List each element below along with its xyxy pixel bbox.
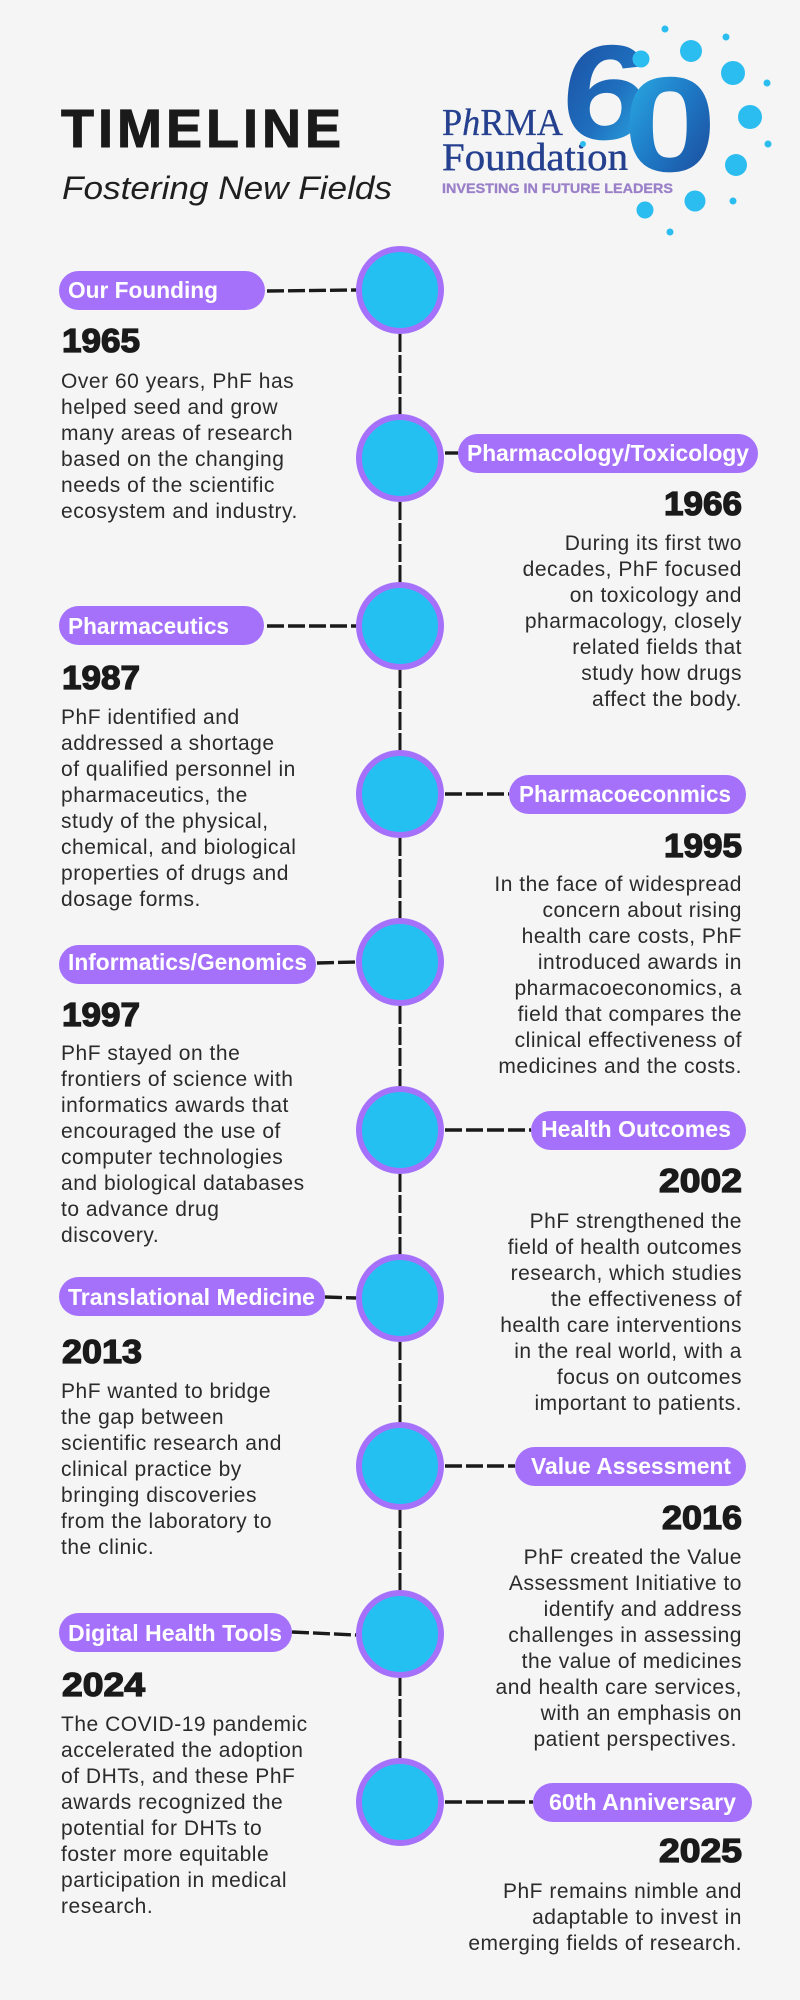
milestone: 60th Anniversary 2025: PhF remains nimble and: [503, 1880, 742, 1903]
milestone: Digital Health Tools 2024: research.: [61, 1895, 153, 1918]
milestone: Pharmacoeconmics 1995: concern about rising: [542, 899, 742, 922]
milestone: Digital Health Tools 2024: potential for DHTs to: [61, 1817, 262, 1840]
milestone: Value Assessment 2016: challenges in assessing: [508, 1624, 742, 1647]
milestone: Value Assessment 2016: and health care services,: [496, 1676, 742, 1699]
milestone: Health Outcomes 2002: health care interventions: [500, 1314, 742, 1337]
milestone: Value Assessment 2016: Value Assessment: [531, 1453, 731, 1479]
milestone: Pharmacology/Toxicology 1966: related fields that: [572, 636, 742, 659]
milestone: Health Outcomes 2002: in the real world, with a: [514, 1340, 742, 1363]
milestone: Translational Medicine 2013: bringing discoveries: [61, 1484, 257, 1507]
milestone: Pharmacoeconmics 1995: clinical effectiveness of: [515, 1029, 742, 1052]
logo: PhRMA Foundation 60: [442, 18, 772, 236]
milestone: 60th Anniversary 2025: 60th Anniversary: [549, 1789, 736, 1815]
milestone: Pharmacology/Toxicology 1966: study how drugs: [581, 662, 742, 685]
milestone: Pharmaceutics 1987: dosage forms.: [61, 888, 201, 911]
milestone: Pharmacoeconmics 1995: Pharmacoeconmics: [519, 781, 731, 807]
milestone: Translational Medicine 2013: Translational Medicine: [68, 1284, 315, 1310]
timeline nodes: [359, 249, 441, 1843]
milestone: 60th Anniversary 2025: [468, 1783, 752, 1955]
milestone: Health Outcomes 2002: Health Outcomes: [541, 1116, 731, 1142]
milestone: Translational Medicine 2013: the clinic.: [61, 1536, 154, 1559]
title: TIMELINE: [61, 99, 341, 159]
milestone: Pharmacoeconmics 1995: health care costs, PhF: [522, 925, 742, 948]
milestone: Informatics/Genomics 1997: [59, 945, 316, 1247]
milestone: Digital Health Tools 2024: participation in medical: [61, 1869, 287, 1892]
milestone: Translational Medicine 2013: [59, 1277, 325, 1559]
milestone: Pharmacoeconmics 1995: 1995: [664, 827, 742, 864]
milestone: Digital Health Tools 2024: [59, 1613, 308, 1918]
logo wordmark: PhRMA: [442, 102, 564, 144]
milestone: Pharmaceutics 1987: addressed a shortage: [61, 732, 275, 755]
milestone: Translational Medicine 2013: PhF wanted to bridge: [61, 1380, 271, 1403]
logo number 60: 0: [623, 50, 717, 200]
milestone: Pharmacology/Toxicology 1966: decades, PhF focused: [523, 558, 742, 581]
connectors: [267, 290, 533, 1802]
logo wordmark: [442, 102, 628, 179]
milestone: Health Outcomes 2002: [500, 1111, 746, 1415]
milestone: Translational Medicine 2013: clinical practice by: [61, 1458, 242, 1481]
milestone: Informatics/Genomics 1997: informatics awards that: [61, 1094, 289, 1117]
milestone: 60th Anniversary 2025: 2025: [659, 1832, 742, 1869]
milestone: Pharmacoeconmics 1995: In the face of widespread: [494, 873, 742, 896]
milestone: Pharmacoeconmics 1995: field that compares the: [518, 1003, 742, 1026]
milestone: Translational Medicine 2013: from the laboratory to: [61, 1510, 272, 1533]
milestone: Pharmaceutics 1987: 1987: [62, 659, 140, 696]
milestone: Health Outcomes 2002: research, which studies: [511, 1262, 742, 1285]
milestone: Health Outcomes 2002: the effectiveness of: [551, 1288, 742, 1311]
milestone: Pharmacology/Toxicology 1966: 1966: [664, 485, 742, 522]
milestone: Our Founding 1965: Over 60 years, PhF has: [61, 370, 294, 393]
milestone: Health Outcomes 2002: focus on outcomes: [557, 1366, 742, 1389]
logo number 60: [557, 18, 717, 200]
milestone: Value Assessment 2016: identify and address: [544, 1598, 742, 1621]
milestone: Pharmacology/Toxicology 1966: pharmacology, closely: [525, 610, 742, 633]
milestone: Pharmaceutics 1987: PhF identified and: [61, 706, 240, 729]
milestone: Digital Health Tools 2024: Digital Health Tools: [68, 1620, 282, 1646]
milestone: Informatics/Genomics 1997: discovery.: [61, 1224, 159, 1247]
milestone: Value Assessment 2016: patient perspectives.: [533, 1728, 737, 1751]
milestone: Health Outcomes 2002: PhF strengthened the: [530, 1210, 742, 1233]
milestone: 60th Anniversary 2025: emerging fields of research.: [468, 1932, 742, 1955]
milestone: Pharmacology/Toxicology 1966: During its first two: [565, 532, 742, 555]
milestone: Informatics/Genomics 1997: and biological databases: [61, 1172, 305, 1195]
milestone: Pharmaceutics 1987: properties of drugs and: [61, 862, 289, 885]
milestone: Pharmacoeconmics 1995: pharmacoeconomics, a: [514, 977, 742, 1000]
milestone: Our Founding 1965: Our Founding: [68, 277, 218, 303]
milestone: Health Outcomes 2002: 2002: [659, 1162, 742, 1199]
milestone: 60th Anniversary 2025: adaptable to invest in: [532, 1906, 742, 1929]
milestone: Pharmaceutics 1987: of qualified personnel in: [61, 758, 296, 781]
milestone: Translational Medicine 2013: 2013: [62, 1333, 142, 1370]
milestone: Pharmacoeconmics 1995: medicines and the costs.: [498, 1055, 742, 1078]
milestone: Digital Health Tools 2024: of DHTs, and these PhF: [61, 1765, 295, 1788]
milestone: Digital Health Tools 2024: The COVID-19 pandemic: [61, 1713, 308, 1736]
milestone: Value Assessment 2016: with an emphasis on: [540, 1702, 742, 1725]
logo wordmark: Foundation: [442, 136, 628, 179]
logo bubbles: [580, 26, 772, 236]
milestone: Pharmacology/Toxicology 1966: Pharmacology/Toxicology: [467, 440, 749, 466]
milestone: Pharmaceutics 1987: Pharmaceutics: [68, 613, 229, 639]
milestone: Pharmacoeconmics 1995: [494, 775, 746, 1078]
milestone: Pharmacology/Toxicology 1966: [458, 434, 758, 711]
milestone: Our Founding 1965: based on the changing: [61, 448, 284, 471]
milestone: Pharmacology/Toxicology 1966: on toxicology and: [570, 584, 742, 607]
milestone: Informatics/Genomics 1997: frontiers of science with: [61, 1068, 293, 1091]
milestone: Digital Health Tools 2024: awards recognized the: [61, 1791, 283, 1814]
milestone: Health Outcomes 2002: important to patients.: [534, 1392, 742, 1415]
milestone: Our Founding 1965: many areas of research: [61, 422, 293, 445]
milestone: Translational Medicine 2013: the gap between: [61, 1406, 224, 1429]
milestone: Our Founding 1965: helped seed and grow: [61, 396, 278, 419]
milestone: Our Founding 1965: 1965: [62, 322, 140, 359]
milestone: Informatics/Genomics 1997: computer technologies: [61, 1146, 283, 1169]
milestone: Informatics/Genomics 1997: encouraged the use of: [61, 1120, 281, 1143]
milestone: Our Founding 1965: [59, 271, 298, 523]
logo number 60: 6: [557, 18, 655, 168]
milestone: Pharmaceutics 1987: pharmaceutics, the: [61, 784, 248, 807]
milestone: Digital Health Tools 2024: foster more equitable: [61, 1843, 269, 1866]
milestone: Pharmacology/Toxicology 1966: affect the body.: [592, 688, 742, 711]
timeline spine: [398, 334, 402, 1758]
logo tagline: INVESTING IN FUTURE LEADERS: [442, 180, 673, 196]
milestone: Digital Health Tools 2024: accelerated the adoption: [61, 1739, 304, 1762]
milestone: Digital Health Tools 2024: 2024: [62, 1666, 146, 1703]
subtitle: Fostering New Fields: [62, 170, 392, 206]
milestone: Pharmacoeconmics 1995: introduced awards in: [538, 951, 742, 974]
milestone: Value Assessment 2016: the value of medicines: [522, 1650, 742, 1673]
milestone: Translational Medicine 2013: scientific research and: [61, 1432, 282, 1455]
milestone: Pharmaceutics 1987: study of the physical,: [61, 810, 269, 833]
milestone: Our Founding 1965: needs of the scientific: [61, 474, 275, 497]
milestone: Informatics/Genomics 1997: to advance drug: [61, 1198, 219, 1221]
milestone: Health Outcomes 2002: field of health outcomes: [508, 1236, 742, 1259]
milestone: Informatics/Genomics 1997: Informatics/Genomics: [68, 949, 307, 975]
milestone: Value Assessment 2016: [496, 1447, 746, 1751]
milestone: Pharmaceutics 1987: [59, 606, 296, 911]
milestone: Informatics/Genomics 1997: 1997: [62, 996, 140, 1033]
milestone: Informatics/Genomics 1997: PhF stayed on the: [61, 1042, 240, 1065]
milestone: Value Assessment 2016: 2016: [662, 1499, 742, 1536]
milestone: Our Founding 1965: ecosystem and industry.: [61, 500, 298, 523]
milestone: Pharmaceutics 1987: chemical, and biological: [61, 836, 296, 859]
milestone: Value Assessment 2016: PhF created the Value: [524, 1546, 742, 1569]
milestone: Value Assessment 2016: Assessment Initiative to: [509, 1572, 742, 1595]
